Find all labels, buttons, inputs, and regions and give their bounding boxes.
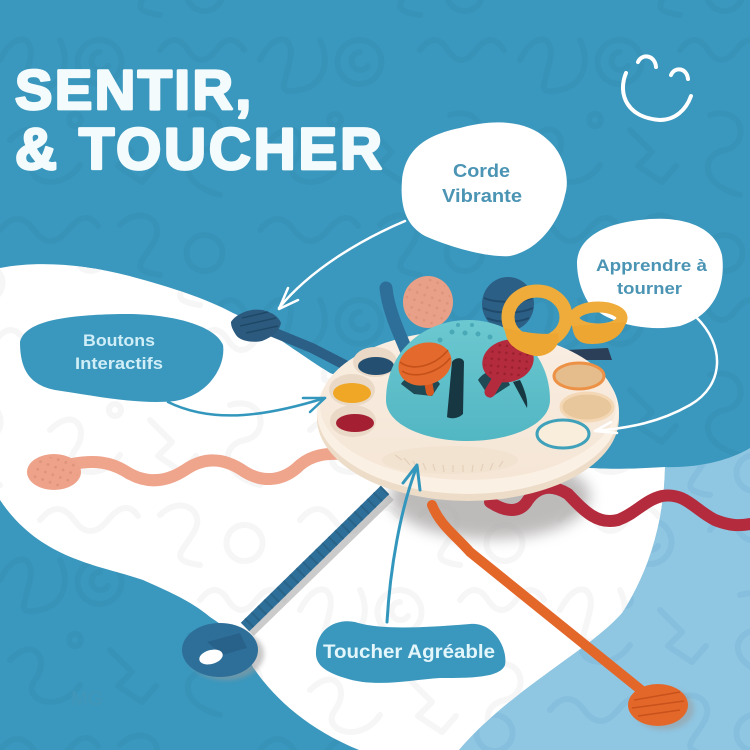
background: white central blob <box>0 264 665 750</box>
background: light blue corner panel <box>459 448 750 750</box>
title: SENTIR, <box>15 58 251 121</box>
toy: yellow ring <box>505 291 566 356</box>
arrow: corde vibrante <box>279 221 405 309</box>
tentacle: red wavy strap <box>490 488 750 525</box>
callout: toucher agréable <box>316 621 505 683</box>
callout: apprendre à tourner <box>577 219 723 328</box>
tentacle: pink wavy strap <box>27 454 345 490</box>
watermark MG: MG <box>71 688 103 710</box>
arrow: apprendre à tourner <box>595 317 717 433</box>
callout: boutons interactifs: Interactifs <box>75 354 163 373</box>
title: & TOUCHER <box>15 117 382 182</box>
arrow: boutons interactifs <box>168 398 325 415</box>
shadow under toy <box>390 455 590 539</box>
toy: grip ridges <box>382 446 518 474</box>
toy: orange peg <box>393 336 457 392</box>
icon: smiley <box>623 56 691 120</box>
toy: blue arm loop <box>386 288 407 352</box>
toy: base disc <box>317 330 619 501</box>
callout: boutons interactifs: Boutons <box>83 331 155 350</box>
callout: apprendre à tourner: tourner <box>617 279 682 298</box>
toy: navy ball peg <box>482 277 534 331</box>
toy: pink textured disc peg <box>403 276 453 328</box>
callout: apprendre à tourner: Apprendre à <box>596 256 708 275</box>
toy: red paddle peg <box>477 334 539 392</box>
arrow: toucher agréable <box>387 465 420 622</box>
callout: corde vibrante: Corde <box>453 161 510 181</box>
toy: teal dome <box>386 320 550 441</box>
callout: boutons interactifs <box>20 314 223 402</box>
tentacle: navy teether top left <box>231 310 345 365</box>
tentacle: orange teether <box>432 505 694 730</box>
tentacle: blue ring strap <box>182 490 391 680</box>
callout: toucher agréable: Toucher Agréable <box>323 642 495 663</box>
toy: left holes <box>329 347 397 437</box>
callout: corde vibrante: Vibrante <box>442 186 522 206</box>
callout: corde vibrante <box>402 122 567 256</box>
toy: second yellow loop <box>566 307 626 360</box>
toy: right holes <box>537 363 613 448</box>
title <box>15 58 382 182</box>
